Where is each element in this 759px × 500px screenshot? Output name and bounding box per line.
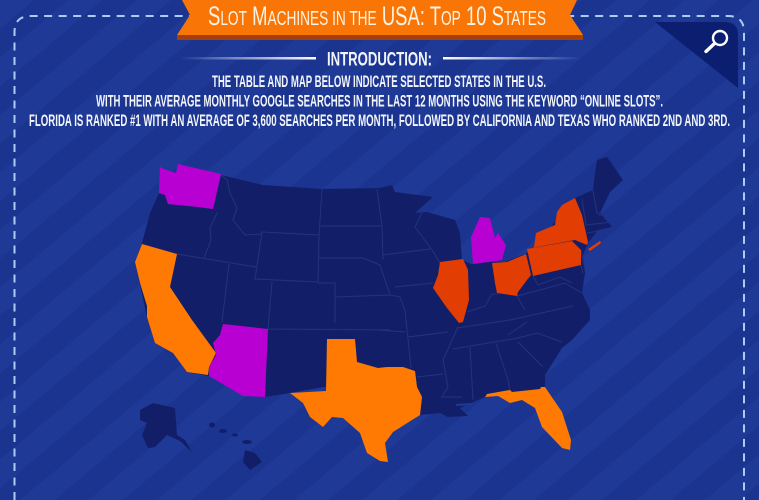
arizona xyxy=(209,324,268,397)
ohio xyxy=(492,254,531,296)
california xyxy=(135,244,216,375)
illinois xyxy=(433,259,469,323)
state borders xyxy=(177,175,612,400)
icon: magnifying glass xyxy=(706,31,727,52)
intro heading: INTRODUCTION: xyxy=(327,50,432,70)
lake pontchartrain xyxy=(456,404,472,405)
long island xyxy=(588,241,601,251)
washington xyxy=(159,164,221,209)
alaska xyxy=(140,403,192,452)
mainland dark states xyxy=(135,157,623,417)
hawaii xyxy=(209,422,262,470)
pennsylvania xyxy=(527,241,581,276)
new york xyxy=(532,198,588,248)
map of the USA xyxy=(135,157,623,470)
title banner xyxy=(177,0,583,40)
florida xyxy=(485,387,571,450)
title: SLOT MACHINES IN THE USA: TOP 10 STATES xyxy=(208,1,546,31)
texas xyxy=(290,339,422,462)
intro text xyxy=(29,73,730,130)
michigan xyxy=(471,217,506,264)
corner tab xyxy=(655,22,738,88)
